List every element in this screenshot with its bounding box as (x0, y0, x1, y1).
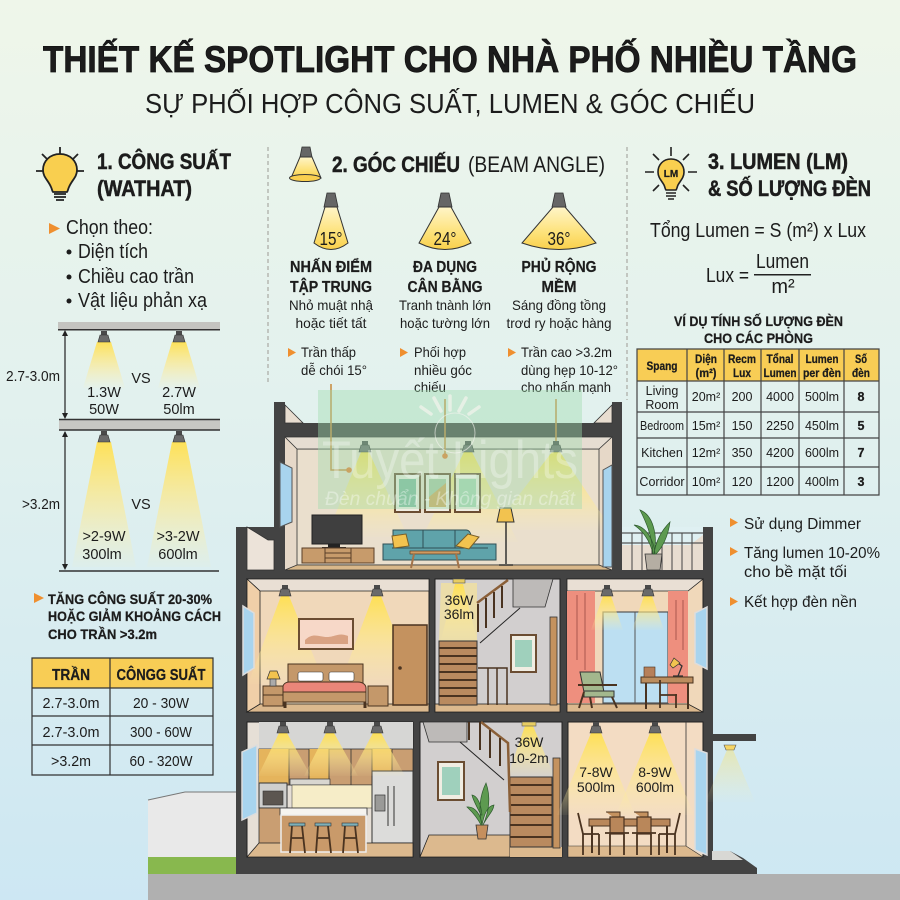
table: trần và công suất: 20 - 30W (133, 695, 190, 712)
table: room lumen calculation: (m²) (696, 366, 716, 380)
panel: 1 công suất (6, 147, 231, 775)
table: room lumen calculation: Số (855, 352, 867, 366)
table: room lumen calculation: 2250 (766, 419, 794, 433)
selection list: Vật liệu phản xạ (78, 290, 208, 312)
right balcony (622, 510, 713, 570)
table: trần và công suất (32, 658, 213, 775)
heading (332, 152, 605, 177)
beam type: 36 degrees: 36° (548, 229, 570, 249)
callout: tăng công suất: TĂNG CÔNG SUẤT 20-30% (48, 590, 212, 607)
heading (708, 149, 871, 201)
table: room lumen calculation (637, 349, 879, 495)
table: room lumen calculation: Lux (733, 366, 751, 380)
table: room lumen calculation: 12m² (692, 446, 720, 460)
wattage label: 36W (445, 592, 474, 608)
tips list: Sử dụng Dimmer (744, 516, 862, 533)
diagram: ceiling height comparison: VS (131, 497, 151, 513)
selection list: Diện tích (78, 241, 148, 263)
table: trần và công suất: 60 - 320W (130, 753, 193, 770)
table: room lumen calculation: Bedroom (640, 419, 684, 433)
room: living room (280, 384, 612, 570)
diagram: ceiling height comparison: >3-2W (156, 529, 200, 545)
oven (259, 783, 287, 808)
beam type: 15 degrees: hoặc tiết tất (296, 315, 367, 331)
diagram: ceiling height comparison: 2.7W (162, 385, 196, 401)
room: upper stairs (435, 579, 560, 712)
heading: 3. LUMEN (LM) (708, 149, 848, 174)
callout: tăng công suất: HOẶC GIẢM KHOẢNG CÁCH (48, 608, 221, 624)
table heading: VÍ DỤ TÍNH SỐ LƯỢNG ĐÈN (674, 312, 843, 329)
table: room lumen calculation: Spang (646, 359, 678, 373)
table: room lumen calculation: 400lm (805, 475, 839, 489)
icon: spot cone (290, 147, 321, 182)
beam type: 24 degrees: 24° (434, 229, 456, 249)
table: trần và công suất: >3.2m (51, 753, 91, 770)
table: room lumen calculation: 4000 (766, 390, 794, 404)
bed (282, 664, 366, 708)
diagram: ceiling height comparison: VS (131, 371, 151, 387)
side windows (243, 606, 707, 675)
table: room lumen calculation: Lumen (764, 366, 796, 380)
beam type: 15 degrees: Nhỏ muật nhậ (289, 297, 373, 313)
desk, chair and lamp (641, 658, 693, 709)
beam type: 24 degrees: Phối hợp (414, 344, 466, 360)
table: room lumen calculation: 8 (858, 390, 865, 404)
icon: LM bulb (645, 147, 697, 199)
tv and stand (302, 515, 374, 563)
table: room lumen calculation: đèn (852, 366, 870, 380)
panel: 3 lumen (637, 147, 880, 611)
table: trần và công suất: 2.7-3.0m (42, 724, 100, 741)
table: room lumen calculation: 7 (858, 446, 865, 460)
table: room lumen calculation: 150 (732, 419, 752, 433)
beam type: 24 degrees: Tranh tnành lớn (399, 297, 491, 313)
heading: & SỐ LƯỢNG ĐÈN (708, 175, 871, 201)
diagram: ceiling height comparison (6, 322, 220, 571)
beam type: 24 degrees: nhiều góc (414, 362, 472, 378)
beam type: 24 degrees: ĐA DỤNG (413, 259, 477, 276)
panel: 2 góc chiếu (288, 147, 618, 395)
tips list: Kết hợp đèn nền (744, 594, 857, 611)
table: room lumen calculation: Tổnal (766, 352, 794, 366)
heading: (BEAM ANGLE) (468, 152, 605, 177)
table: room lumen calculation: 10m² (692, 475, 720, 489)
table: room lumen calculation: 5 (858, 419, 865, 433)
beam type: 15 degrees: dễ chói 15° (301, 362, 367, 378)
table: room lumen calculation: 1200 (766, 475, 794, 489)
icon: light bulb (36, 147, 84, 200)
beam type: 36 degrees: trơd ry hoặc hàng (506, 315, 612, 331)
parapet wedges (285, 405, 612, 423)
table: trần và công suất: 300 - 60W (130, 724, 193, 741)
nightstands and lamp (263, 671, 388, 706)
wattage label: 36lm (444, 606, 474, 622)
door (393, 625, 427, 705)
diagram: ceiling height comparison: 2.7-3.0m (6, 369, 60, 385)
table heading (674, 312, 843, 346)
wall art (395, 474, 480, 512)
formulas: Lumen (756, 251, 809, 273)
ground (148, 792, 900, 900)
table: room lumen calculation: Diện (695, 352, 717, 366)
table heading: CHO CÁC PHÒNG (704, 329, 813, 346)
room: dining (557, 722, 703, 857)
tips list (730, 516, 880, 611)
formulas: Tổng Lumen = S (m²) x Lux (650, 220, 866, 242)
tips list: cho bề mặt tối (744, 564, 847, 581)
table: room lumen calculation: 15m² (692, 419, 720, 433)
wattage label (509, 734, 549, 766)
windows (280, 462, 292, 527)
fridge (372, 771, 413, 843)
wattage labels: 8-9W (638, 764, 673, 780)
window: dining (695, 749, 707, 855)
table: room lumen calculation: 450lm (805, 419, 839, 433)
beam type: 36 degrees: PHỦ RỘNG (522, 257, 596, 276)
wattage labels: 7-8W (579, 764, 614, 780)
table: room lumen calculation: per đèn (803, 366, 841, 380)
leader lines (331, 384, 556, 473)
stools (289, 823, 358, 853)
beam type: 24 degrees (399, 193, 491, 395)
room: bedroom (247, 579, 429, 712)
beam type: 24 degrees: CÂN BẰNG (408, 277, 482, 296)
callout: tăng công suất: CHO TRẦN >3.2m (48, 626, 157, 642)
armchair (578, 672, 617, 708)
formulas: Lux = (706, 265, 749, 287)
island (280, 808, 367, 852)
beam type: 36 degrees (506, 193, 618, 395)
small porch roof and steps (705, 734, 757, 874)
room: lower stairs (420, 722, 562, 857)
table: room lumen calculation: 600lm (805, 446, 839, 460)
selection list (49, 217, 208, 312)
wattage labels (577, 764, 674, 795)
diagram: ceiling height comparison: >3.2m (22, 497, 60, 513)
table: room lumen calculation: 500lm (805, 390, 839, 404)
beam type: 15 degrees: TẬP TRUNG (290, 277, 372, 296)
sofa (383, 530, 496, 568)
wattage labels: 500lm (577, 779, 615, 795)
diagram: ceiling height comparison: 50W (89, 402, 119, 418)
plant (467, 783, 494, 839)
heading: 1. CÔNG SUẤT (97, 149, 231, 174)
beams (326, 452, 408, 537)
floor lamp (497, 508, 514, 565)
selection list: Chiều cao trần (78, 266, 194, 288)
diagram: ceiling height comparison: 600lm (158, 547, 198, 563)
beam type: 15 degrees: 15° (320, 229, 342, 249)
table: room lumen calculation: 4200 (766, 446, 794, 460)
diagram: ceiling height comparison: 300lm (82, 547, 122, 563)
icon: LM bulb: LM (664, 169, 678, 180)
window (603, 612, 668, 703)
table: room lumen calculation: Room (645, 398, 679, 412)
diagram: ceiling height comparison: 1.3W (87, 385, 121, 401)
table: room lumen calculation: Recm (728, 352, 756, 366)
wattage label (444, 592, 474, 622)
tips list: Tăng lumen 10-20% (744, 545, 880, 562)
beam type: 36 degrees: MỀM (542, 277, 576, 296)
subtitle: SỰ PHỐI HỢP CÔNG SUẤT, LUMEN & GÓC CHIẾU (145, 87, 755, 119)
formulas: m² (771, 276, 795, 298)
beam type: 36 degrees: Trần cao >3.2m (521, 344, 612, 360)
wattage labels: 600lm (636, 779, 674, 795)
table: room lumen calculation: 350 (732, 446, 752, 460)
diagram: ceiling height comparison: >2-9W (82, 529, 126, 545)
left balcony (247, 527, 274, 570)
table: room lumen calculation: Lumen (806, 352, 838, 366)
table: trần và công suất: 2.7-3.0m (42, 695, 100, 712)
house cross-section (236, 384, 757, 874)
picture (511, 635, 536, 672)
room: study (567, 579, 703, 712)
stairs (460, 722, 552, 847)
room: kitchen (247, 722, 413, 857)
beam type: 36 degrees: cho nhấn mạnh (521, 379, 611, 395)
table: room lumen calculation: 120 (732, 475, 752, 489)
table: room lumen calculation: 20m² (692, 390, 720, 404)
heading: 2. GÓC CHIẾU (332, 152, 460, 177)
watermark: Đèn chuẩn - Không gian chất (325, 489, 576, 510)
formulas (650, 220, 866, 298)
side door (553, 758, 560, 848)
table: room lumen calculation: 200 (732, 390, 752, 404)
callout: tăng công suất (34, 590, 221, 642)
watermark: Tuyết Lights (322, 431, 578, 490)
window: kitchen (242, 745, 257, 820)
dining table and chairs (578, 812, 680, 855)
heading: (WATHAT) (97, 176, 192, 201)
side door (550, 617, 557, 705)
diagram: ceiling height comparison: 50lm (163, 402, 195, 418)
structure walls and slabs (236, 402, 713, 874)
table: trần và công suất: CÔNGG SUẤT (116, 665, 206, 684)
wattage label: 36W (515, 734, 544, 750)
beam type: 15 degrees: Trần thấp (301, 344, 356, 360)
beam type: 24 degrees: hoặc tường lớn (400, 315, 490, 331)
picture (299, 619, 353, 649)
curtains (567, 591, 688, 703)
heading (97, 149, 231, 201)
watermark (318, 390, 582, 510)
beam type: 15 degrees: NHẤN ĐIỂM (290, 257, 372, 276)
picture (438, 762, 464, 800)
beam type: 24 degrees: chiếu (414, 379, 446, 395)
table: room lumen calculation: 3 (858, 475, 865, 489)
beam type: 15 degrees (288, 193, 373, 378)
table: room lumen calculation: Kitchen (641, 446, 683, 460)
wattage label: 10-2m (509, 750, 549, 766)
beam type: 36 degrees: Sáng đồng tồng (512, 297, 606, 313)
selection list: Chọn theo: (66, 217, 153, 239)
table: room lumen calculation: Corridor (639, 475, 685, 489)
table: trần và công suất: TRẦN (52, 665, 90, 684)
stairs (439, 580, 520, 705)
table: room lumen calculation: Living (646, 384, 678, 398)
beam type: 36 degrees: dùng hẹp 10-12° (521, 362, 618, 378)
